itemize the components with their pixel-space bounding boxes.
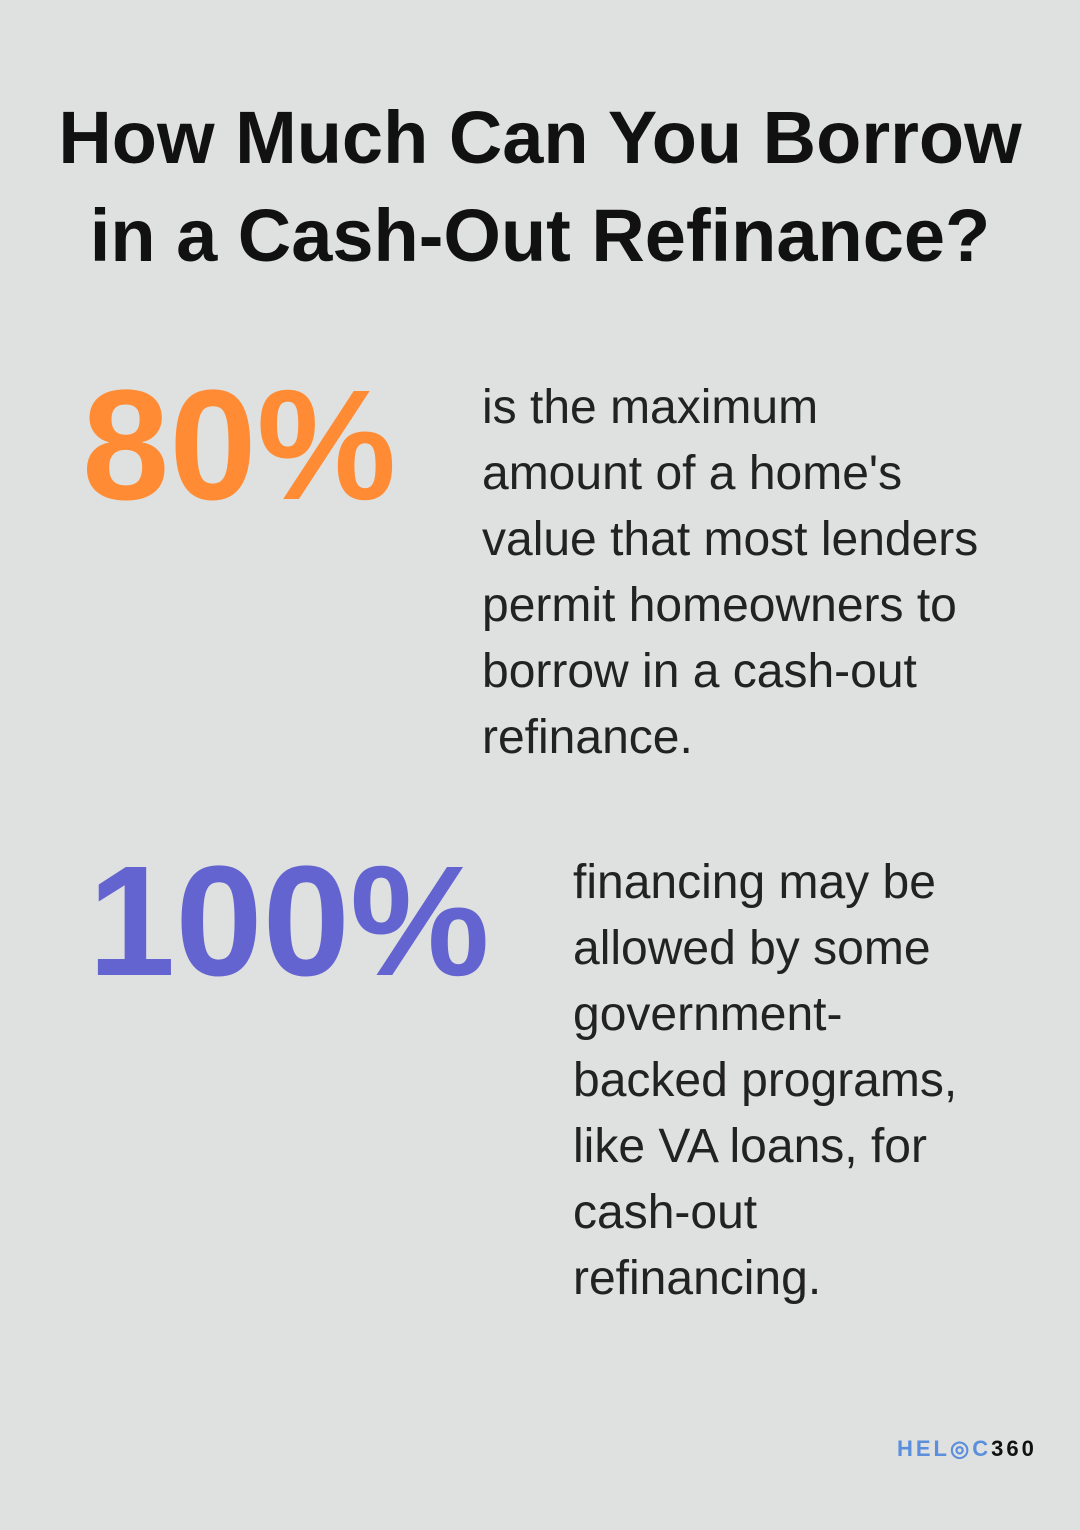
stat 2 description xyxy=(573,856,957,1305)
title: in a Cash-Out Refinance? xyxy=(90,194,990,277)
stat 2 description: cash-out xyxy=(573,1186,757,1239)
stat 1: 80%: 80% xyxy=(82,358,396,533)
stat 2 description: allowed by some xyxy=(573,922,931,975)
stat 1 description: is the maximum xyxy=(482,381,818,434)
stat 1 description: permit homeowners to xyxy=(482,579,957,632)
stat 2 description: refinancing. xyxy=(573,1252,821,1305)
stat 2 description: financing may be xyxy=(573,856,936,909)
stat 1 description xyxy=(482,381,978,764)
stat 2 description: government- xyxy=(573,988,842,1041)
title xyxy=(58,96,1022,277)
stat 1 description: amount of a home's xyxy=(482,447,902,500)
logo: HEL◎C360 xyxy=(897,1436,1037,1461)
stat 2 description: backed programs, xyxy=(573,1054,957,1107)
stat 1 description: borrow in a cash-out xyxy=(482,645,917,698)
stat 2: 100%: 100% xyxy=(88,834,490,1009)
title: How Much Can You Borrow xyxy=(58,96,1022,179)
stat 1 description: refinance. xyxy=(482,711,693,764)
stat 1 description: value that most lenders xyxy=(482,513,978,566)
stat 2 description: like VA loans, for xyxy=(573,1120,927,1173)
